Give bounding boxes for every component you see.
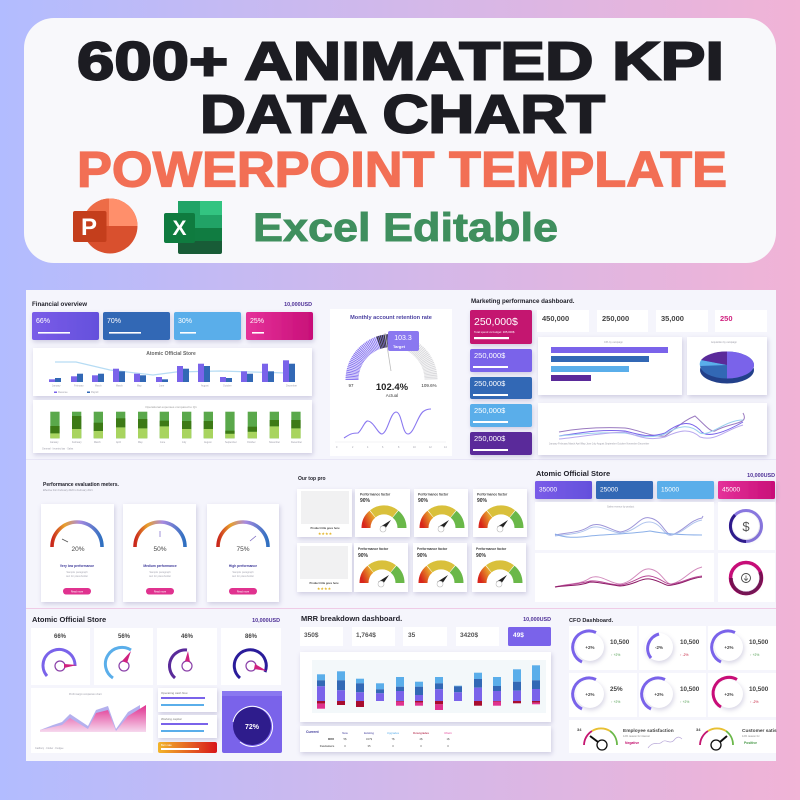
metric cards: +2% [585,645,595,650]
chart: stacked green bars: August [204,441,212,444]
donut: profit [718,553,775,602]
heading: marketing dashboard: Marketing performance dashboard. [471,298,575,305]
meter card: 20%: Read more [71,590,84,594]
performance factor gauges: 90% [418,498,429,504]
amount: 10,000USD [284,302,312,308]
panel: MRR breakdown dashboard [300,614,551,752]
metric cards: ↑ -2% [750,700,758,704]
KPI cards: 45000 [722,486,740,494]
chart: stacked green bars: March [94,441,101,444]
meter card: 50%: Medium performance [143,564,177,568]
chart: retention line: 4 [367,446,369,449]
gauge: retention: 102.4% [376,382,409,393]
meter card: 50% [123,504,196,602]
subheading: excel editable: Excel Editable [253,206,558,250]
chart: stacked green bars: October [247,441,256,444]
chart: atomic official store bars: February [74,384,84,388]
stat cards [537,310,767,332]
panel: our top pro [297,476,527,592]
meter card: 75%: 75% [236,546,250,553]
chart: retention line: 8 [398,446,400,449]
KPI cards: 35 [408,632,416,639]
chart: atomic official store bars: June [159,384,165,388]
metric cards: +2% [654,692,664,697]
chart: atomic official store bars: October [223,384,232,388]
chart: profit line [535,553,714,602]
chart: atomic official store bars: March [95,384,102,388]
performance factor gauges [354,489,527,592]
table: current MRR: 1$ [446,737,450,741]
campaign cards: 250,000$ [474,379,506,388]
gauge: retention: Target [393,344,406,349]
table: current MRR: 0 [392,744,394,748]
chart: profit margin area: Profit margin comparison chart [69,693,102,696]
panel: CFO dashboard [569,618,777,753]
panel: 72% ring [222,691,282,753]
table: current MRR: MRR [328,737,334,741]
stat cards: 450,000 [542,314,569,323]
meter card: 20% [41,504,114,602]
KPI cards: 70% [107,318,121,325]
panel: satisfaction gauges: 12% reason for [742,734,760,738]
performance factor gauges: Performance factor [358,547,389,551]
chart: stacked green bars: January [50,441,59,444]
chart: campaign bars: CPL by campaign [604,341,623,344]
gauge cards: 86% [245,634,258,640]
panel: working capital: Working capital [161,717,182,721]
chart: retention line: 2 [352,446,354,449]
table: current MRR: 347$ [366,737,373,741]
KPI cards [32,312,313,340]
campaign cards: 250,000$ [474,406,506,415]
chart: sales line [535,502,714,550]
chart: acquisition pie: Acquisition by campaign [711,341,737,344]
table: current MRR: 0 [420,744,422,748]
chart: retention line: 12 [429,446,432,449]
panel: satisfaction gauges: 34 [696,727,701,732]
title card [24,18,776,263]
heading: data chart: DATA CHART [200,84,605,144]
gauge cards [31,628,281,685]
product cards: Product title goes here [309,581,339,585]
chart: atomic official store bars: May [137,384,142,388]
campaign cards: Total spend vs budget: 305,000$ [474,330,515,334]
gauge cards: 56% [118,634,131,640]
metric cards: ↑ +2% [611,653,620,657]
chart: retention line: 14 [444,446,447,449]
amount: 10,000USD [747,473,775,479]
panel: satisfaction gauges: Negative [625,741,639,745]
chart: campaign lines [538,403,767,455]
chart: campaign bars [538,337,682,395]
donut: sales [718,502,775,550]
panel: satisfaction gauges: Customer satis [742,728,777,734]
metric cards: ↑ +2% [611,700,620,704]
table: current MRR: 35 [367,744,371,748]
table: current MRR: Churn [444,731,452,735]
panel: atomic official store gauges [31,615,282,753]
KPI cards [535,481,775,499]
chart: atomic official store bars: March [116,384,123,388]
table: current MRR: 7$ [391,737,395,741]
product cards: Product title goes here [310,526,340,530]
performance factor gauges: 90% [360,498,371,504]
chart: profit margin area [31,688,153,753]
meter card: 75%: Sample paragraph [232,570,254,574]
performance factor gauges: Performance factor [476,547,507,551]
metric cards: +2% [724,645,734,650]
chart: acquisition pie [687,337,767,395]
KPI cards: 30% [178,318,192,325]
panel: performance evaluation meters: Effective from February 2020 to February 2021 [43,489,93,492]
chart: retention line: 10 [413,446,416,449]
metric cards: ↑ +2% [680,700,689,704]
chart: profit margin area: Cadbury · Cinder · Fudgee [35,747,64,750]
metric cards: +2% [585,692,595,697]
meter card: 50%: Sample paragraph [149,570,171,574]
amount: 10,000USD [252,618,280,624]
gauge: retention: 109.6% [421,383,437,388]
performance factor gauges: 90% [476,553,487,559]
metric cards: 10,500 [680,639,700,646]
meter card: 20%: Very low performance [60,564,94,568]
meter card: 75% [207,504,279,602]
icon: Excel logo: X [172,217,187,240]
chart: atomic official store bars: December [286,384,297,388]
panel: satisfaction gauges: 34 [577,727,582,732]
table: current MRR: Current [306,730,319,734]
chart: atomic official store bars: Revenue [58,391,68,394]
icon: Excel logo [164,201,222,254]
stat cards: 35,000 [661,314,684,323]
table: current MRR: 0 [344,744,346,748]
campaign cards: 250,000$ [474,351,506,360]
donut: sales: $ [742,519,750,534]
table: current MRR: 2$ [419,737,423,741]
performance factor gauges: 90% [477,498,488,504]
heading: MRR breakdown: MRR breakdown dashboard. [301,614,402,623]
chart: retention line [335,409,447,449]
performance factor gauges: Performance factor [360,492,391,496]
panel: satisfaction gauges [569,720,777,753]
campaign cards: 250,000$ [474,316,518,328]
table: current MRR: Downgrades [413,731,429,735]
chart: stacked green bars: December [291,441,302,444]
chart: retention line: 6 [382,446,384,449]
chart: stacked MRR bars [300,652,551,722]
meter card: 20%: 20% [71,546,85,553]
gauge cards: 66% [54,634,67,640]
heading: atomic official store: Atomic Official Store [536,469,610,478]
chart: stacked green bars: September [225,441,237,444]
metric cards: +2% [724,692,734,697]
chart: atomic official store bars: August [201,384,209,388]
heading: atomic official store: Atomic Official Store [32,615,106,624]
metric cards: 10,500 [749,639,769,646]
icon: PowerPoint logo: P [81,214,97,241]
chart: campaign lines: January February March April May June July August September October November December [549,442,649,446]
KPI cards: 49$ [513,632,524,639]
KPI cards: 25000 [600,486,618,494]
KPI cards: 1,764$ [356,632,376,639]
icon: PowerPoint logo [73,198,138,254]
KPI cards: 66% [36,318,50,325]
gauge: retention: Actual [386,393,398,398]
performance factor gauges: 90% [358,553,369,559]
table: current MRR: Customers [320,744,335,748]
chart: stacked green bars [33,400,312,453]
panel: satisfaction gauges: Positive [744,741,757,745]
chart: sales line: Sales revenue by product [607,506,634,508]
stat cards: 250,000 [602,314,629,323]
panel: operating cash flow [158,688,217,712]
gauge: retention: 103.3 [394,335,412,342]
performance factor gauges: 90% [417,553,428,559]
performance factor gauges: Performance factor [477,492,508,496]
chart: atomic official store bars [33,348,312,396]
chart: stacked green bars: April [116,441,121,444]
product cards: ★★★★ [317,586,332,591]
table: current MRR: 5$ [343,737,347,741]
product cards [297,489,352,592]
panel: working capital [158,715,217,738]
metric cards: -2% [655,645,663,650]
campaign cards: 250,000$ [474,434,506,443]
metric cards: 25% [610,686,623,693]
chart: stacked green bars: General · Inverted tax · Sales [42,448,74,450]
meter card: 20%: Sample paragraph [66,570,88,574]
table: current MRR: Existing [364,731,374,735]
bar: burn rate [158,742,217,753]
panel: financial overview [32,301,313,453]
table: current MRR: Upgrades [387,731,400,735]
chart: atomic official store bars: Atomic Official Store [146,351,196,357]
chart: stacked green bars: July [182,441,187,444]
performance factor gauges: Performance factor [417,547,448,551]
chart: stacked green bars: May [138,441,143,444]
chart: stacked green bars: November [269,441,280,444]
gauge: retention [348,331,437,398]
metric cards [569,626,776,717]
KPI cards: 15000 [661,486,679,494]
performance factor gauges: Performance factor [418,492,449,496]
product cards: ★★★★ [318,531,333,536]
metric cards: 10,500 [680,686,700,693]
gauge: retention: 97 [348,383,354,388]
panel: 72% ring: 72% [245,724,260,731]
chart: stacked green bars: June [160,441,166,444]
panel: satisfaction gauges: 12% reason for interest [623,734,650,738]
KPI cards: 35000 [539,486,557,494]
heading: evaluation meters: Performance evaluation meters. [43,482,119,488]
chart: stacked green bars: Operational expenses compared to Q1 [145,405,197,409]
heading: 600+ animated KPI: 600+ ANIMATED KPI [77,32,724,92]
table: current MRR [300,726,551,752]
heading: CFO dashboard: CFO Dashboard. [569,618,614,624]
KPI cards: 3420$ [460,632,478,639]
meter card: 75%: text for placeholder [232,574,254,578]
amount: 10,000USD [523,617,551,623]
gauge cards: 46% [181,634,194,640]
metric cards: 10,500 [610,639,630,646]
meter card: 50%: text for placeholder [149,574,171,578]
meter card: 50%: Read more [154,590,167,594]
panel: performance evaluation meters [41,482,279,602]
panel: atomic official store lines [535,469,775,602]
chart: stacked green bars: February [72,441,82,444]
KPI cards [300,627,551,646]
meter card: 75%: Read more [237,590,250,594]
panel: operating cash flow: Operating cash flow [161,691,188,695]
heading: powerpoint template: POWERPOINT TEMPLATE [77,142,727,198]
heading: our top pro: Our top pro [298,476,326,482]
metric cards: 10,500 [749,686,769,693]
meter card: 50%: 50% [153,546,167,553]
panel: marketing performance dashboard [470,298,767,455]
KPI cards: 25% [250,318,264,325]
metric cards: ↑ -2% [680,653,688,657]
chart: retention line: 0 [336,446,338,449]
stat cards: 250 [720,314,733,323]
dashboard collage [26,290,777,761]
KPI cards: 350$ [304,632,319,639]
meter card: 20%: text for placeholder [66,574,88,578]
panel: monthly account retention rate [330,309,452,456]
bar: burn rate: Burn rate [161,743,172,747]
table: current MRR: New [342,731,349,735]
chart: atomic official store bars: January [52,384,61,388]
panel: satisfaction gauges: Employee satisfaction [623,728,674,734]
meter card: 75%: High performance [229,564,257,568]
heading: financial overview: Financial overview [32,301,87,308]
heading: retention rate: Monthly account retention rate [350,315,432,321]
table: current MRR: 0 [447,744,449,748]
chart: atomic official store bars: Payroll [91,391,99,394]
metric cards: ↑ +2% [750,653,759,657]
campaign cards [470,310,532,455]
